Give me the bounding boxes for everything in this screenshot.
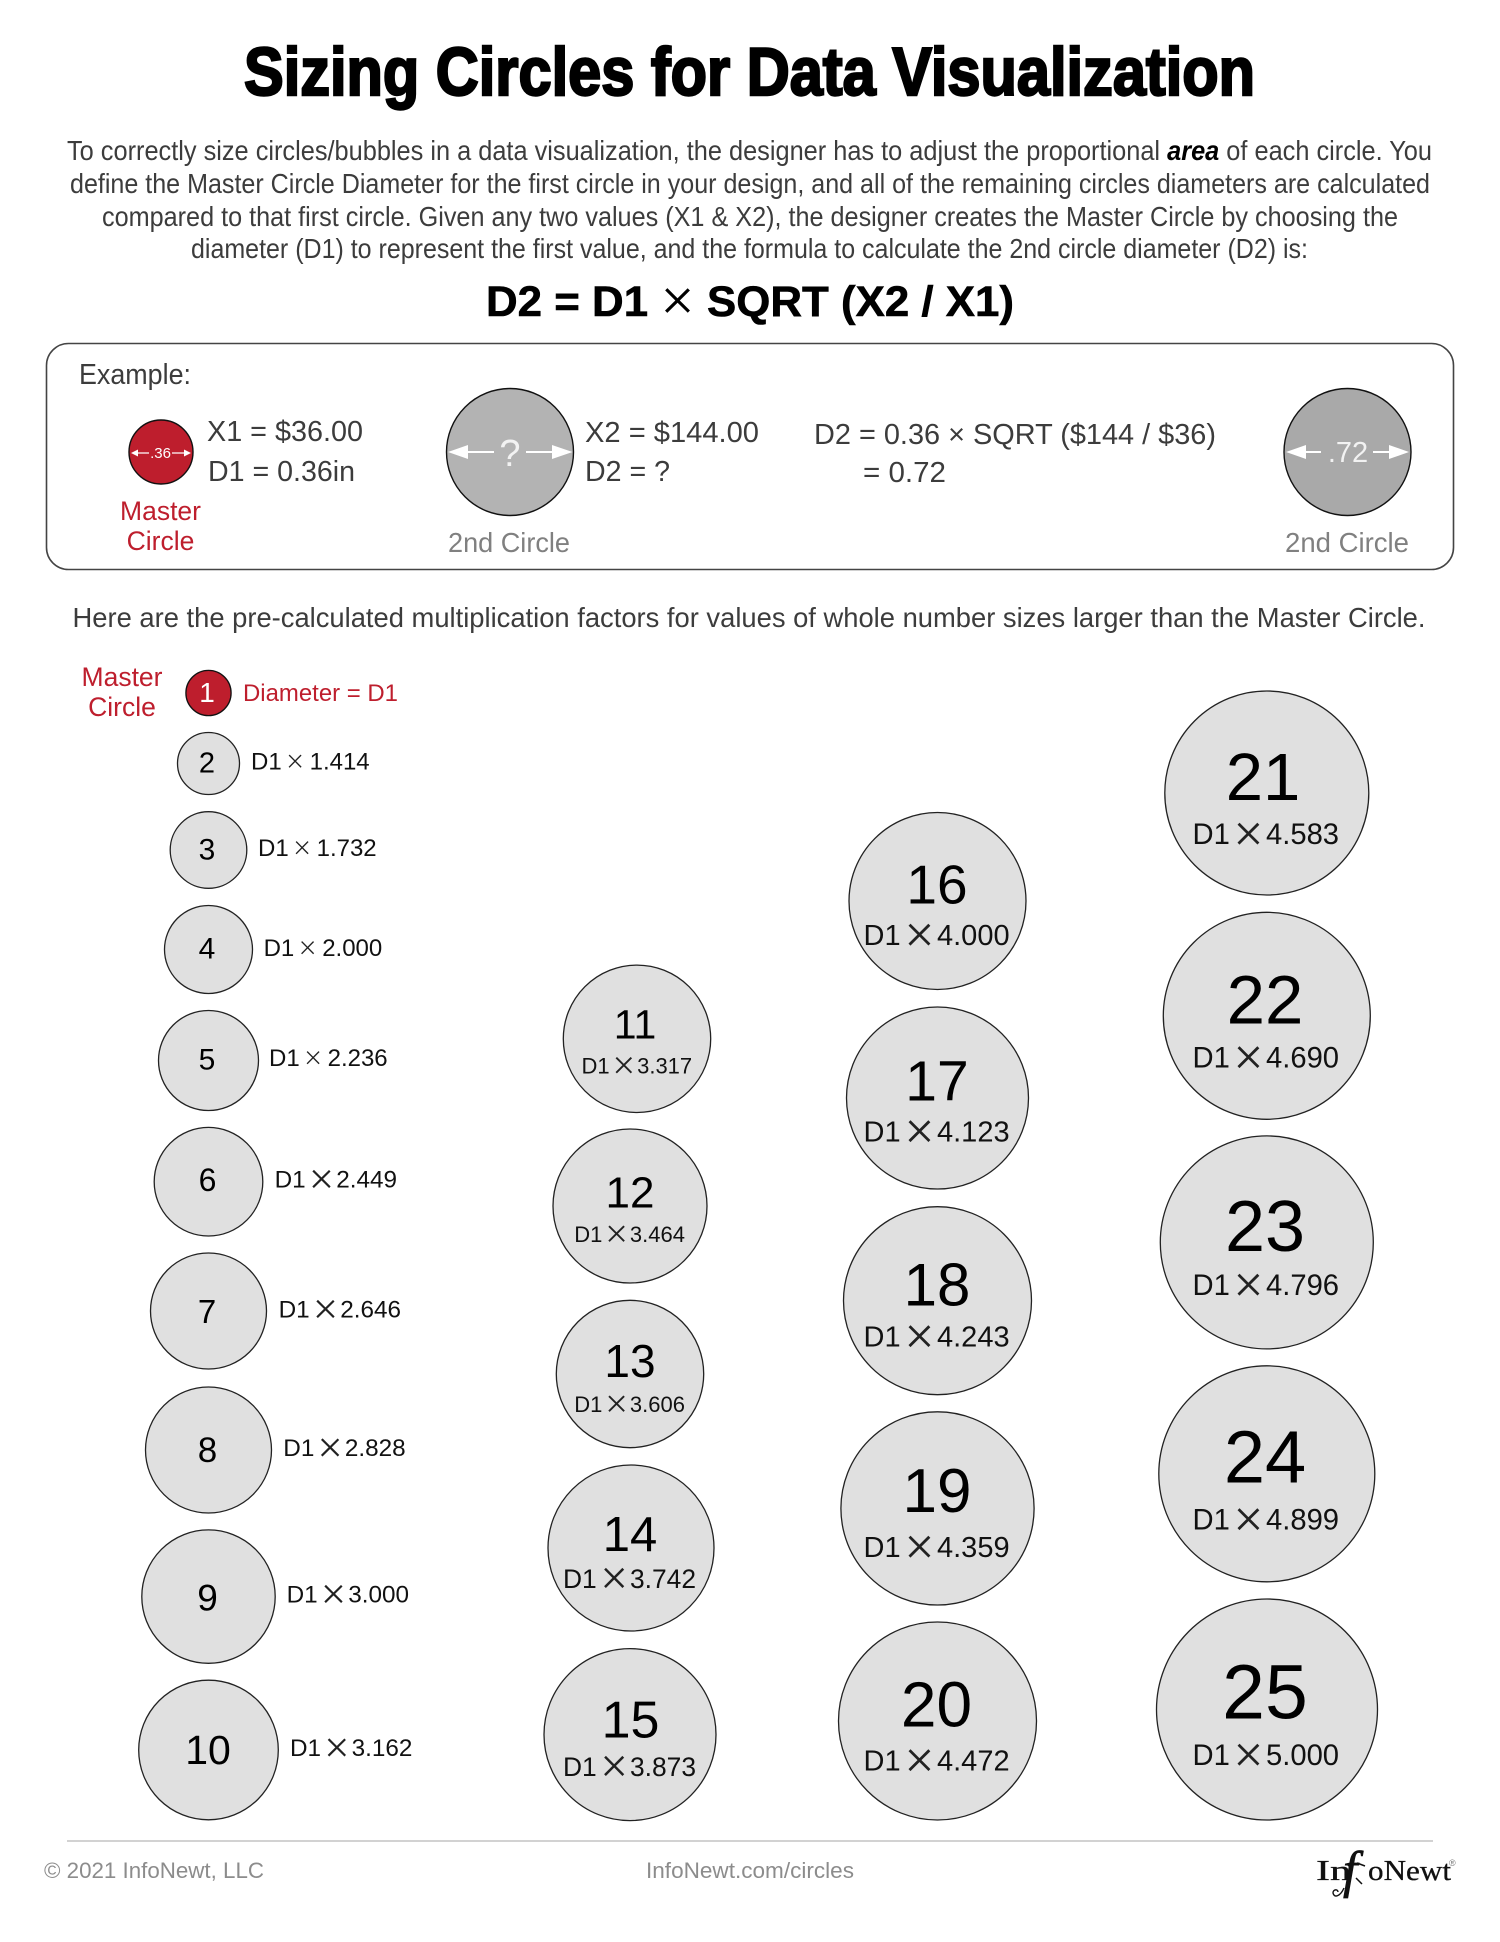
circle 16: D1 xyxy=(864,920,901,952)
circle 8: 8 xyxy=(198,1431,217,1470)
circle 9: × xyxy=(321,1570,346,1619)
logo: InfoNewt: ® xyxy=(1449,1858,1456,1868)
circle 22: 22 xyxy=(1227,961,1303,1038)
circle 8 xyxy=(146,1387,406,1513)
circle 24: D1 xyxy=(1192,1505,1230,1537)
formula: D2 = D1 xyxy=(486,278,645,326)
circle 4: 2.000 xyxy=(322,935,382,962)
circle 20: × xyxy=(904,1732,935,1790)
circle 19: D1 xyxy=(864,1532,901,1564)
icon: second circle with question mark: ? xyxy=(499,433,521,475)
circle 7: × xyxy=(313,1285,338,1334)
circle 19: × xyxy=(904,1518,935,1576)
circle 18: × xyxy=(904,1307,935,1365)
second value text xyxy=(585,417,759,488)
icon: master circle with dimension arrows xyxy=(129,420,193,484)
circle 14 xyxy=(548,1465,714,1631)
circle 21: D1 xyxy=(1192,819,1230,851)
section intro: Here are the pre-calculated multiplication factors for values of whole number sizes larger than the Master Circle. xyxy=(72,602,1426,633)
circle 22: D1 xyxy=(1192,1043,1230,1075)
formula: SQRT (X2 / X1) xyxy=(695,278,1014,326)
master circle caption: Master xyxy=(120,496,201,526)
circle 12: D1 xyxy=(574,1222,602,1247)
circle 1 xyxy=(186,670,398,716)
first value text: X1 = $36.00 xyxy=(207,416,363,448)
circle 10: 10 xyxy=(185,1727,231,1773)
intro paragraph: compared to that first circle. Given any two values (X1 & X2), the designer creates the Master Circle by choosing the xyxy=(102,201,1398,232)
circle 6: × xyxy=(309,1155,334,1204)
first value text xyxy=(207,416,363,488)
circle 1: 1 xyxy=(199,677,215,708)
circle 2 xyxy=(178,732,370,794)
circle 17: × xyxy=(904,1103,935,1161)
circle 8: 2.828 xyxy=(345,1435,406,1462)
master circle caption: Circle xyxy=(127,526,194,556)
circle 23 xyxy=(1160,1136,1373,1349)
circle 5: D1 xyxy=(269,1045,300,1072)
circle 17: D1 xyxy=(864,1117,901,1149)
circle 9: 9 xyxy=(197,1577,218,1618)
circle 9: 3.000 xyxy=(348,1582,409,1609)
circle 4: × xyxy=(298,930,317,966)
icon: second circle result xyxy=(1284,388,1411,516)
worked calculation: D2 = 0.36 × SQRT ($144 / $36) xyxy=(814,419,1216,451)
icon: second circle result: .72 xyxy=(1328,437,1368,469)
circle 7: D1 xyxy=(279,1297,310,1324)
circle 12: × xyxy=(605,1212,628,1256)
formula: × xyxy=(660,268,695,333)
circle 20 xyxy=(838,1622,1036,1820)
circle 14: D1 xyxy=(563,1564,597,1594)
circle 17: 17 xyxy=(905,1049,969,1113)
circle 15: 15 xyxy=(602,1691,659,1749)
circle 17: 4.123 xyxy=(937,1117,1010,1149)
circle 20: D1 xyxy=(864,1746,901,1778)
circle 7 xyxy=(150,1253,401,1369)
circle 2: 2 xyxy=(199,747,215,779)
circle 2: D1 xyxy=(251,749,282,776)
circle 5: × xyxy=(304,1040,322,1076)
intro paragraph xyxy=(67,135,1432,264)
circle 24: 4.899 xyxy=(1266,1505,1339,1537)
circle 15: D1 xyxy=(563,1752,597,1782)
second circle caption: 2nd Circle xyxy=(448,527,570,558)
circle 20: 4.472 xyxy=(937,1746,1010,1778)
circle 25: × xyxy=(1233,1726,1264,1784)
circle 16: 16 xyxy=(906,853,968,915)
circle 3: 1.732 xyxy=(317,835,377,862)
circle 9: D1 xyxy=(287,1582,318,1609)
circle 2: × xyxy=(286,743,304,779)
circle 21: × xyxy=(1233,805,1264,863)
circle 5: 5 xyxy=(199,1043,215,1076)
panel: example xyxy=(46,344,1454,570)
circle 24: × xyxy=(1233,1491,1264,1549)
circle 6: D1 xyxy=(275,1167,306,1194)
master circle label: Master xyxy=(82,662,163,692)
circle 3: D1 xyxy=(258,835,289,862)
circle 6: 2.449 xyxy=(336,1167,397,1194)
result caption: 2nd Circle xyxy=(1285,527,1409,558)
circle 14: 3.742 xyxy=(630,1564,696,1594)
master circle caption xyxy=(120,496,201,556)
circle 9 xyxy=(142,1530,409,1663)
circle 18: 4.243 xyxy=(937,1321,1010,1353)
circle 18: 18 xyxy=(904,1251,970,1318)
circle 14: 14 xyxy=(603,1508,657,1562)
circle 25: D1 xyxy=(1192,1740,1230,1772)
circle 22 xyxy=(1163,912,1370,1119)
circle 13: 3.606 xyxy=(630,1392,685,1417)
circle 12: 12 xyxy=(606,1168,654,1217)
second value text: X2 = $144.00 xyxy=(585,417,759,449)
circle 6 xyxy=(154,1127,397,1236)
circle 18: D1 xyxy=(864,1321,901,1353)
circle 21: 21 xyxy=(1226,740,1300,815)
circle 13 xyxy=(556,1300,704,1448)
circle 19: 4.359 xyxy=(937,1532,1010,1564)
logo: InfoNewt: oNewt xyxy=(1368,1856,1451,1887)
second value text: D2 = ? xyxy=(585,456,670,488)
circle 13: D1 xyxy=(574,1392,602,1417)
circle 6: 6 xyxy=(199,1162,216,1198)
circle 19: 19 xyxy=(903,1457,971,1526)
circle 10 xyxy=(139,1680,412,1820)
circle 20: 20 xyxy=(901,1668,972,1740)
circle 10: D1 xyxy=(290,1735,321,1762)
circle 16: 4.000 xyxy=(937,920,1010,952)
title: Sizing Circles for Data Visualization xyxy=(244,34,1255,110)
circle 16 xyxy=(849,812,1026,990)
icon: second circle with question mark xyxy=(446,388,574,516)
logo: InfoNewt: In xyxy=(1316,1856,1351,1887)
intro paragraph: To correctly size circles/bubbles in a data visualization, the designer has to adjust the proportional area of each circle. You xyxy=(67,135,1432,166)
circle 21 xyxy=(1165,691,1369,895)
circle 12: 3.464 xyxy=(630,1222,685,1247)
footer copyright: © 2021 InfoNewt, LLC xyxy=(44,1858,264,1883)
intro paragraph: diameter (D1) to represent the first value, and the formula to calculate the 2nd circle diameter (D2) is: xyxy=(191,233,1308,264)
example label: Example: xyxy=(79,359,191,391)
worked calculation xyxy=(814,419,1216,489)
circle 11 xyxy=(563,965,711,1112)
circle 15 xyxy=(544,1649,716,1821)
circle 24 xyxy=(1159,1366,1375,1582)
circle 2: 1.414 xyxy=(310,749,370,776)
circle 15: × xyxy=(600,1740,628,1793)
circle 25 xyxy=(1156,1599,1378,1820)
master circle label: Circle xyxy=(88,692,156,722)
circle 11: 11 xyxy=(614,1001,656,1047)
circle 11: × xyxy=(612,1044,635,1088)
circle 5 xyxy=(158,1010,388,1110)
circle 7: 2.646 xyxy=(340,1297,401,1324)
circle 15: 3.873 xyxy=(630,1752,696,1782)
circle 11: D1 xyxy=(582,1054,610,1078)
circle 23: 23 xyxy=(1225,1187,1305,1267)
circle 21: 4.583 xyxy=(1266,819,1339,851)
footer url: InfoNewt.com/circles xyxy=(646,1858,854,1883)
circle 22: × xyxy=(1233,1029,1264,1087)
circle 16: × xyxy=(904,906,935,964)
circle 4: 4 xyxy=(199,932,215,965)
circle 1: Diameter = D1 xyxy=(243,680,398,707)
circle 19 xyxy=(841,1412,1034,1605)
worked calculation: = 0.72 xyxy=(863,457,946,489)
circle 14: × xyxy=(600,1552,628,1605)
circle 4 xyxy=(164,906,382,994)
circle 11: 3.317 xyxy=(637,1054,692,1078)
circle 8: × xyxy=(317,1423,343,1472)
circle 25: 5.000 xyxy=(1266,1740,1339,1772)
circle 4: D1 xyxy=(264,935,294,962)
circle 25: 25 xyxy=(1222,1649,1308,1735)
circle 5: 2.236 xyxy=(328,1045,388,1072)
icon: master circle with dimension arrows: .36 xyxy=(150,445,171,462)
circle 10: 3.162 xyxy=(352,1735,412,1762)
circle 23: × xyxy=(1233,1256,1264,1314)
circle 3 xyxy=(170,812,377,888)
circle 8: D1 xyxy=(283,1435,314,1462)
circle 10: × xyxy=(324,1723,350,1772)
circle 7: 7 xyxy=(198,1293,216,1330)
circle 12 xyxy=(553,1129,707,1283)
logo: InfoNewt xyxy=(1316,1842,1456,1899)
circle 3: 3 xyxy=(199,833,215,866)
circle 23: D1 xyxy=(1192,1270,1230,1302)
circle 24: 24 xyxy=(1224,1415,1306,1498)
circle 13: 13 xyxy=(604,1335,656,1387)
master circle label xyxy=(82,662,163,722)
circle 18 xyxy=(844,1207,1032,1395)
circle 13: × xyxy=(605,1382,628,1426)
circle 3: × xyxy=(293,830,311,866)
first value text: D1 = 0.36in xyxy=(208,456,355,488)
circle 17 xyxy=(846,1007,1028,1189)
circle 23: 4.796 xyxy=(1266,1270,1339,1302)
circle 22: 4.690 xyxy=(1266,1043,1339,1075)
logo: InfoNewt: f xyxy=(1343,1842,1364,1899)
